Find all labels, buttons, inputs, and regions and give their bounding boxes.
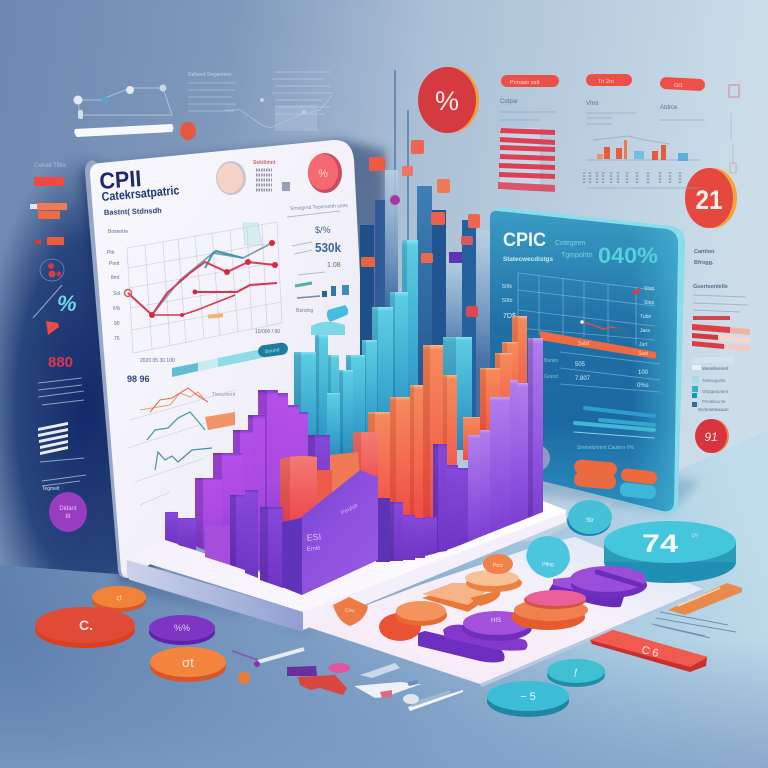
red label bar bbox=[590, 630, 708, 672]
broad peach chip bbox=[422, 583, 500, 612]
top faint text block and line bbox=[188, 72, 332, 131]
right column legend swatches bbox=[692, 357, 734, 412]
top-right red pills: Prmaan satt bbox=[510, 80, 540, 86]
panel pale circle badge bbox=[216, 161, 246, 195]
blue grid chart bbox=[502, 273, 655, 348]
red large disc: C. bbox=[79, 617, 93, 633]
chart teal line bbox=[205, 251, 243, 268]
top-right small text bbox=[500, 99, 705, 124]
large cyan disc 74: P² bbox=[692, 534, 698, 540]
purple disc bbox=[149, 615, 215, 645]
panel face bbox=[490, 211, 678, 511]
heart chip bbox=[333, 597, 368, 626]
large purple front panel bbox=[282, 470, 378, 595]
blue grid chart: 50lk bbox=[502, 284, 512, 290]
blue panel stats: Bankn bbox=[544, 358, 558, 364]
purple stacked slabs bbox=[419, 566, 647, 662]
orange small disc: ςt bbox=[116, 595, 122, 602]
blue grid chart: Step bbox=[644, 286, 655, 292]
panel grid chart bbox=[107, 222, 282, 364]
top-right red pills: Gt1 bbox=[674, 83, 683, 89]
chart axis labels: Bosentre bbox=[108, 229, 128, 235]
purple block bbox=[287, 666, 317, 676]
orange label bar bbox=[668, 583, 742, 615]
orange disc: σt bbox=[182, 655, 194, 670]
rear purple-magenta bars bbox=[165, 390, 330, 570]
panel title text: CPIC bbox=[503, 230, 546, 251]
orange small disc bbox=[92, 586, 146, 612]
blue panel orange band: Sust bbox=[638, 351, 649, 357]
right red 91 disc bbox=[695, 419, 729, 453]
top-right red percent disc bbox=[418, 67, 479, 133]
left side dark data strip bbox=[30, 163, 87, 532]
small text lines near labels bbox=[652, 612, 736, 638]
right slab upper bbox=[550, 566, 647, 606]
chart red line upper bbox=[124, 240, 278, 315]
sidebar text lines bbox=[38, 378, 86, 492]
lower slab long: HIS bbox=[491, 618, 501, 624]
red label bar: C 6 bbox=[640, 644, 660, 660]
white tablet piece bbox=[354, 682, 421, 698]
cyan disc left: − 5 bbox=[520, 691, 536, 703]
chart axis labels: 8mt bbox=[111, 275, 120, 281]
blue grid chart: Jurt bbox=[639, 342, 648, 348]
panel right stats bbox=[287, 203, 349, 314]
red cubes on columns bbox=[361, 140, 480, 317]
sidebar radial chart bbox=[40, 259, 64, 281]
sidebar purple circle bbox=[49, 492, 87, 532]
sidebar red numbers: 880 bbox=[48, 354, 73, 371]
right column legend swatches: Sommertacaon bbox=[698, 407, 729, 412]
top-left slider bar with red knob bbox=[74, 122, 196, 140]
top-right small text: Atdrce bbox=[660, 105, 678, 111]
small cyan discs bbox=[487, 659, 605, 717]
blue grid chart: 50lb bbox=[502, 298, 512, 304]
paper sheet bbox=[308, 537, 703, 684]
panel light edge bbox=[498, 207, 685, 513]
right column legend text bbox=[692, 249, 750, 412]
panel range slider bbox=[127, 342, 289, 384]
orange chips row bbox=[333, 554, 522, 641]
ruler strip bbox=[408, 690, 463, 711]
panel title text bbox=[503, 230, 658, 268]
cyan bubbles bbox=[526, 500, 612, 578]
cyan disc right: ƒ bbox=[573, 667, 579, 677]
blue panel orange band: Salst bbox=[578, 341, 590, 347]
top faint text block and line: Rafsent Tregemens bbox=[188, 72, 232, 78]
sidebar red wedge bbox=[46, 321, 59, 335]
sidebar percent mark bbox=[33, 285, 77, 318]
panel edge bbox=[85, 160, 135, 578]
right column legend swatches: Ottogeaotent bbox=[702, 389, 729, 394]
lower slab long bbox=[419, 611, 532, 662]
panel title: Bastnt( Stdnsdh bbox=[104, 206, 162, 217]
panel header table bbox=[253, 160, 290, 191]
red oval chip bbox=[379, 613, 421, 641]
blue panel stats: 0%s bbox=[637, 383, 649, 389]
tall red and orange bars bbox=[353, 316, 527, 520]
sidebar purple circle: 8I bbox=[65, 514, 71, 520]
platform front face bbox=[127, 560, 303, 632]
blue panel stats: 7.807 bbox=[575, 376, 591, 382]
top-right small text: Cotpar bbox=[500, 99, 518, 105]
heart chip: Cnu bbox=[345, 608, 354, 614]
chart axis labels: 75 bbox=[114, 336, 120, 342]
panel title: Catekrsatpatric bbox=[101, 183, 180, 204]
lower-left floor discs bbox=[35, 586, 226, 682]
panel right stats: Smstgrnd Tepemetth smts bbox=[290, 203, 349, 212]
chart axis labels: Prk bbox=[107, 250, 115, 256]
front red block and peach block bbox=[280, 452, 361, 535]
panel drop shadow bbox=[500, 470, 700, 512]
panel right stats: 530k bbox=[315, 240, 342, 255]
small orange label chip: Prcs bbox=[493, 563, 504, 569]
red puzzle piece bbox=[298, 675, 347, 695]
top-right red 21 disc: 21 bbox=[696, 185, 722, 215]
blue panel stats: 100 bbox=[638, 370, 649, 376]
scattered small pieces bbox=[232, 649, 463, 711]
red-orange right stack bbox=[511, 590, 588, 630]
blue panel stats: 505 bbox=[575, 362, 586, 368]
right column legend swatches: Tarteugurits bbox=[702, 378, 726, 383]
large cyan disc 74: 74 bbox=[642, 530, 678, 558]
lower small line charts bbox=[128, 388, 236, 505]
panel title: CPII bbox=[99, 165, 142, 194]
chart axis labels: 90 bbox=[114, 321, 120, 327]
peach oval chip bbox=[465, 570, 522, 592]
cyan pill on top bbox=[327, 305, 348, 322]
panel title bbox=[99, 165, 180, 217]
lower small line charts: Tiensment bbox=[212, 392, 236, 398]
red large disc bbox=[35, 607, 135, 648]
panel title text: Cotegeen bbox=[555, 240, 585, 247]
sidebar percent mark: % bbox=[57, 291, 77, 316]
top-right red striped table bbox=[498, 128, 555, 192]
blue panel stats: Grand bbox=[544, 374, 558, 380]
blue grid chart: Jass bbox=[640, 328, 651, 334]
right edge small icons bbox=[729, 85, 739, 173]
chart orange marker bbox=[208, 313, 223, 319]
blue panel stats bbox=[544, 352, 660, 392]
right red 91 disc: 91 bbox=[704, 430, 718, 444]
chart axis labels: 10/000 / 90 bbox=[255, 329, 280, 335]
panel red circle badge bbox=[308, 153, 342, 193]
front purple bars left bbox=[205, 490, 283, 588]
panel title text: Tgmpohtn bbox=[561, 252, 593, 259]
pink block bbox=[328, 663, 350, 673]
chart teal marker bbox=[243, 223, 262, 245]
chart axis labels: Sol bbox=[113, 291, 120, 297]
blue panel buttons bbox=[573, 459, 658, 500]
large purple front panel: Peulse bbox=[340, 503, 360, 517]
right column legend text: Cantion bbox=[694, 249, 715, 255]
panel range slider: 98 96 bbox=[127, 374, 150, 384]
sidebar text lines: Tegmelt bbox=[42, 486, 60, 492]
blue grid chart: Step bbox=[644, 300, 655, 306]
floor bbox=[0, 430, 768, 768]
chart grey line bbox=[128, 243, 272, 315]
panel title text: Statecwecdistgs bbox=[503, 256, 553, 263]
panel red circle badge: % bbox=[318, 168, 328, 180]
sidebar white stripes bbox=[38, 422, 68, 455]
3D bar chart bbox=[165, 240, 543, 595]
sidebar purple circle: Didant bbox=[59, 506, 77, 512]
top-right red pills bbox=[501, 74, 705, 91]
panel shadow bbox=[80, 140, 392, 585]
chart axis labels bbox=[107, 229, 280, 364]
chart red line lower bbox=[149, 283, 277, 318]
white platform bbox=[127, 500, 566, 635]
top-right mini bar chart bbox=[584, 136, 700, 188]
right column legend text: Guertsenlelle bbox=[693, 284, 728, 290]
navy rear bar columns with red cubes bbox=[360, 70, 490, 450]
cyan bars bbox=[294, 240, 472, 460]
panel right stats: 1.08 bbox=[327, 262, 341, 269]
top-right red percent disc: % bbox=[435, 86, 459, 116]
right column legend swatches: Pevatlocnm bbox=[702, 399, 726, 404]
panel title text: 040% bbox=[598, 243, 658, 268]
panel header table: Sektlimnt bbox=[253, 160, 276, 166]
left white chart panel bbox=[80, 140, 392, 585]
platform shadow bbox=[127, 575, 320, 635]
orange disc bbox=[150, 647, 226, 682]
panel face bbox=[90, 140, 368, 578]
tag outline bbox=[360, 663, 400, 678]
top-left connected node line chart bbox=[74, 84, 172, 119]
blue grid chart: Tube bbox=[640, 314, 651, 320]
top-right red 21 disc bbox=[685, 168, 737, 228]
platform top bbox=[127, 500, 566, 612]
dark wall glow behind left panel bbox=[0, 150, 190, 670]
large cyan disc 74 bbox=[604, 521, 736, 583]
orange oval chip bbox=[395, 601, 447, 626]
blue panel right bbox=[490, 207, 700, 513]
thin spire line bbox=[395, 70, 408, 320]
right column red bars bbox=[692, 316, 750, 351]
blue panel orange band bbox=[540, 331, 656, 358]
top-right small text: Vfmt bbox=[586, 101, 599, 107]
right column legend text: Bfrogg. bbox=[694, 260, 714, 266]
grey circle behind bars bbox=[524, 445, 550, 471]
sidebar heading: Cetrak Tiltre bbox=[34, 163, 67, 169]
cyan bubble upper: Str bbox=[586, 518, 594, 524]
blue grid chart: 7D$ bbox=[503, 313, 516, 320]
chart axis labels: Preit bbox=[109, 261, 120, 267]
purple disc: %% bbox=[174, 623, 190, 633]
sidebar red bars bbox=[30, 177, 67, 245]
top-right red pills: Trt 2m bbox=[598, 79, 614, 85]
small orange label chip bbox=[483, 554, 513, 574]
right purple bars bbox=[376, 338, 543, 562]
blue panel horizontal stripes: Smmeluhmnt Cauters 0% bbox=[577, 445, 635, 451]
orange ball bbox=[238, 672, 250, 684]
panel right stats: $/% bbox=[315, 225, 331, 235]
right column legend swatches: Meantleerent bbox=[702, 366, 729, 371]
panel range slider: Bound bbox=[265, 347, 280, 355]
white bar with purple dot bbox=[232, 649, 304, 667]
cyan bubble lower: Pftng bbox=[542, 562, 554, 568]
panel right stats: Bandng bbox=[296, 308, 313, 314]
large purple front panel: ESI bbox=[306, 532, 322, 543]
blue panel horizontal stripes bbox=[574, 408, 654, 451]
chart axis labels: 6% bbox=[113, 306, 121, 312]
chart axis labels: 2020 05 30 100 bbox=[140, 358, 175, 364]
large purple front panel: Emle bbox=[307, 546, 321, 553]
